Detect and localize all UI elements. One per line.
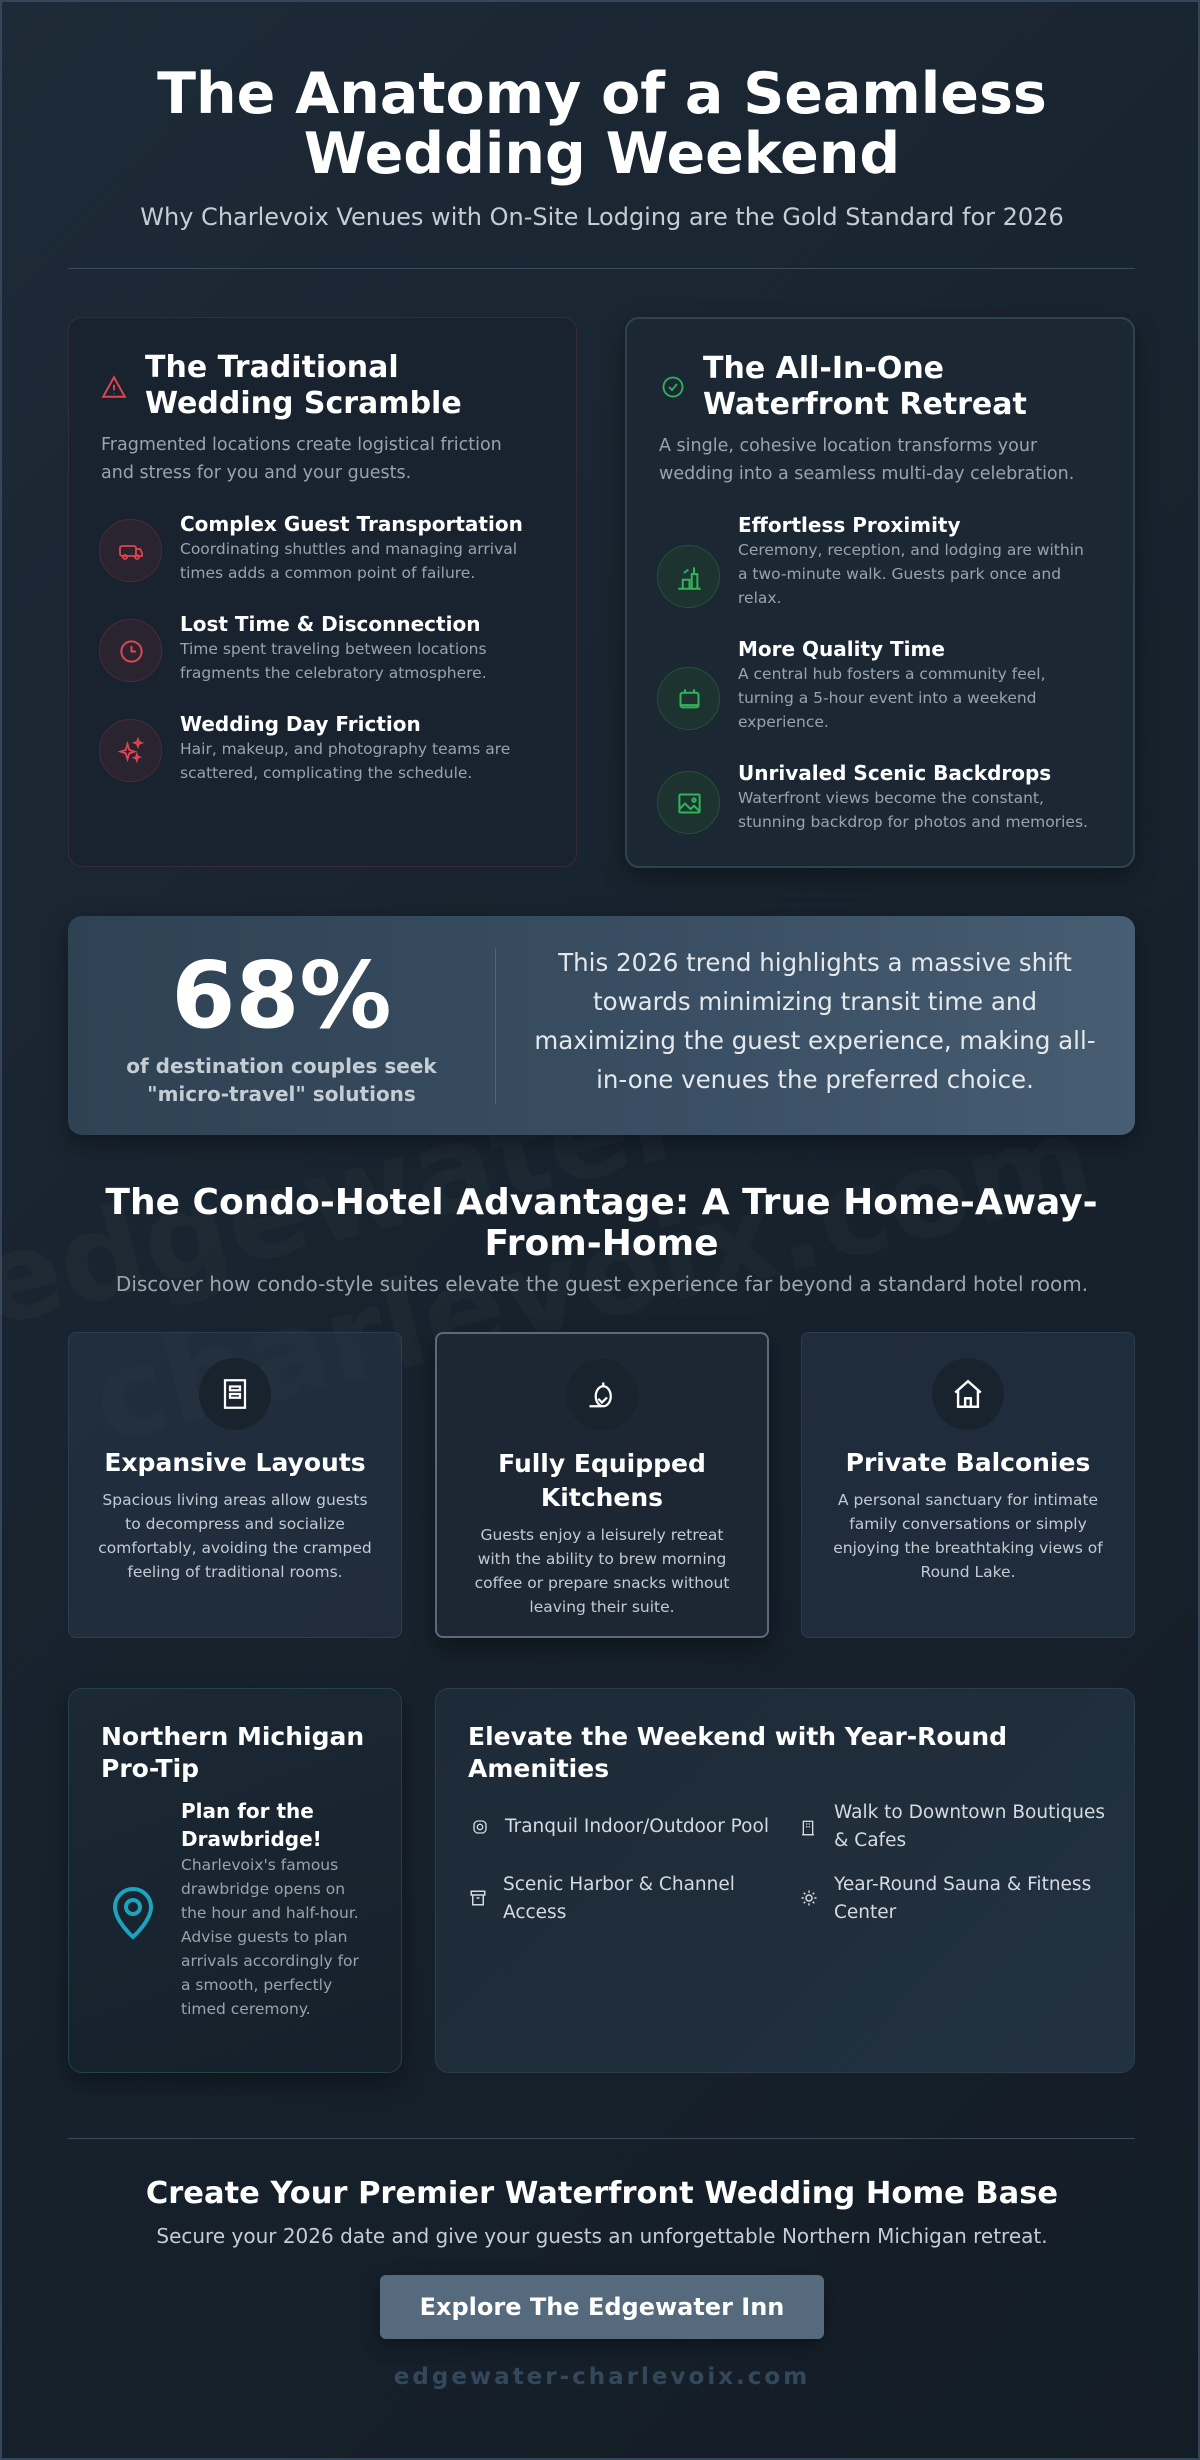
card: balconies: Private Balconies: [846, 1448, 1090, 1477]
section heading: condo-hotel: The Condo-Hotel Advantage: A True Home-Away-: [105, 1182, 1098, 1223]
card: kitchens: Fully Equipped: [498, 1449, 706, 1478]
item: scenic: Waterfront views become the constant, stunning backdrop for photos and memories.: [738, 789, 1088, 831]
section heading: condo-hotel: [105, 1182, 1098, 1264]
title: The Anatomy of a Seamless: [157, 61, 1047, 127]
section heading: condo-hotel: From-Home: [484, 1223, 719, 1264]
panel: all-in-one retreat: [625, 317, 1135, 868]
item: transportation: [99, 512, 523, 582]
item: lost time: Lost Time & Disconnection: [180, 612, 480, 636]
item: quality time: A central hub fosters a community feel, turning a 5-hour event into a weekend experience.: [738, 665, 1046, 731]
heading: Waterfront Retreat: [703, 387, 1027, 422]
panel: pro-tip: [68, 1688, 402, 2073]
watermark: [0, 952, 1106, 1492]
item: proximity: Effortless Proximity: [738, 513, 961, 537]
intro: Fragmented locations create logistical friction and stress for you and your guests.: [101, 435, 502, 483]
title: Wedding Weekend: [304, 121, 900, 187]
heading: The All-In-One: [703, 351, 944, 386]
heading: [145, 350, 462, 421]
pro-tip heading: Northern Michigan: [101, 1722, 364, 1751]
amenity: harbor: Scenic Harbor & Channel Access: [503, 1874, 735, 1923]
pro-tip heading: [101, 1722, 364, 1783]
card: expansive layouts: [68, 1332, 402, 1638]
icon: map pin: [113, 1887, 153, 1940]
heading: The Traditional: [145, 350, 399, 385]
item: friction: Wedding Day Friction: [180, 712, 421, 736]
card: balconies: A personal sanctuary for intimate family conversations or simply enjoying the breathtaking views of Round Lake.: [833, 1491, 1103, 1581]
watermark: charlevoix.com: [79, 1088, 1105, 1470]
card: expansive layouts: Spacious living areas allow guests to decompress and socialize comfortably, avoiding the cramped feeling of traditional rooms.: [98, 1491, 372, 1581]
item: proximity: [657, 513, 1084, 608]
card: kitchens: [435, 1332, 769, 1638]
stat: 68%: of destination couples seek: [126, 1054, 437, 1078]
pro-tip text: Charlevoix's famous drawbridge opens on the hour and half-hour. Advise guests to plan arrivals accordingly for a smooth, perfectly timed ceremony.: [181, 1856, 359, 2018]
amenities heading: Elevate the Weekend with Year-Round: [468, 1722, 1007, 1751]
heading: [703, 351, 1027, 422]
amenities heading: [468, 1722, 1007, 1783]
pro-tip heading: Pro-Tip: [101, 1754, 199, 1783]
title: [157, 61, 1047, 187]
item: lost time: Time spent traveling between locations fragments the celebratory atmosphere.: [180, 640, 487, 682]
footer url: edgewater-charlevoix.com: [394, 2364, 810, 2390]
CTA heading: Create Your Premier Waterfront Wedding Home Base: [146, 2176, 1058, 2211]
pro-tip text: Plan for the Drawbridge!: [181, 1799, 322, 1851]
card: balconies: [801, 1332, 1135, 1638]
card: expansive layouts: Expansive Layouts: [104, 1448, 366, 1477]
item: friction: Hair, makeup, and photography teams are scattered, complicating the schedule.: [180, 740, 510, 782]
card: kitchens: Guests enjoy a leisurely retreat with the ability to brew morning coffee or prepare snacks without leaving their suite.: [475, 1526, 729, 1616]
stat: 68%: "micro-travel" solutions: [147, 1082, 416, 1106]
amenity: sauna: Year-Round Sauna & Fitness Center: [834, 1874, 1091, 1923]
stat banner: [68, 916, 1135, 1135]
CTA button: [380, 2275, 824, 2339]
item: lost time: [99, 612, 487, 682]
item: friction: [99, 712, 510, 782]
stat: 68%: [126, 942, 437, 1106]
amenity: pool: Tranquil Indoor/Outdoor Pool: [505, 1816, 769, 1837]
stat: 68%: 68%: [171, 942, 392, 1049]
amenities heading: Amenities: [468, 1754, 609, 1783]
subtitle: Why Charlevoix Venues with On-Site Lodging are the Gold Standard for 2026: [140, 203, 1064, 231]
item: transportation: Coordinating shuttles and managing arrival times adds a common point of failure.: [180, 540, 517, 582]
item: quality time: [657, 637, 1046, 731]
item: scenic: Unrivaled Scenic Backdrops: [738, 761, 1051, 785]
item: scenic: [657, 761, 1088, 834]
icon: warning: [102, 375, 126, 398]
item: quality time: More Quality Time: [738, 637, 945, 661]
heading: Wedding Scramble: [145, 386, 462, 421]
amenity: downtown: Walk to Downtown Boutiques & Cafes: [834, 1802, 1105, 1851]
stat description: This 2026 trend highlights a massive shift towards minimizing transit time and maximizing the guest experience, making all-in-one venues the preferred choice.: [534, 948, 1096, 1094]
item: transportation: Complex Guest Transportation: [180, 512, 523, 536]
panel: amenities: [435, 1688, 1135, 2073]
item: proximity: Ceremony, reception, and lodging are within a two-minute walk. Guests park once and relax.: [738, 541, 1084, 607]
card: kitchens: Kitchens: [541, 1483, 663, 1512]
intro: A single, cohesive location transforms your wedding into a seamless multi-day celebration.: [659, 436, 1074, 484]
panel: traditional wedding scramble: [68, 317, 577, 867]
CTA button: Explore The Edgewater Inn: [420, 2293, 784, 2321]
CTA subtitle: Secure your 2026 date and give your guests an unforgettable Northern Michigan retreat.: [156, 2224, 1048, 2248]
section subtitle: Discover how condo-style suites elevate the guest experience far beyond a standard hotel room.: [116, 1272, 1088, 1296]
icon: check: [662, 376, 684, 398]
